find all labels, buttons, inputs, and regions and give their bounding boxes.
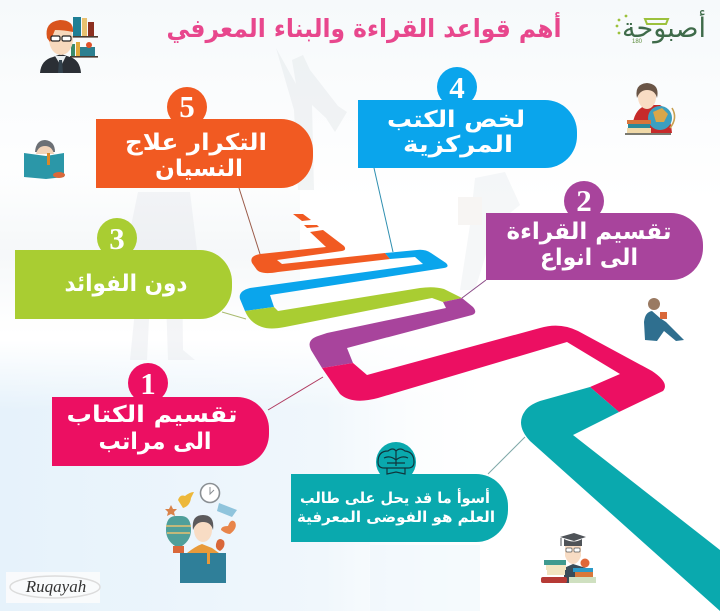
road: orange segment [251,230,390,273]
panel 1: pink: الى مراتب [98,429,212,455]
callout: teal quote: أسوأ ما قد يحل على طالب [300,488,490,507]
zigzag road [240,214,720,611]
title: أهم قواعد القراءة والبناء المعرفي [166,12,562,44]
panel 3: green: 3 [109,221,125,256]
panel 4: blue: المركزية [403,132,513,158]
panel 2: purple: الى انواع [540,245,638,271]
panel 3: green [15,218,232,319]
icon: brain and book [378,449,414,474]
road: teal segment [521,387,720,611]
panel 4: blue [358,67,577,168]
panel 2: purple: تقسيم القراءة [506,219,672,245]
road: green segment [245,287,462,328]
icon: reader behind teal book [24,140,65,179]
road: blue segment [240,250,448,311]
panel 3: green: دون الفوائد [64,271,188,297]
icon: boy reading with ideas [165,484,237,583]
callout: teal quote: العلم هو الفوضى المعرفية [297,508,495,526]
panel 2: purple [486,181,703,280]
panel 4: blue: 4 [449,70,465,105]
signature: Ruqayah [6,572,100,603]
logo: أصبوحة [622,9,706,44]
silhouette: faint business people [124,48,520,360]
icon: graduate with books [541,533,596,583]
road: pink segment [322,326,665,412]
panel 1: pink: تقسيم الكتاب [66,402,238,428]
icon: student with globe [625,83,675,135]
signature: Ruqayah: Ruqayah [25,577,86,596]
panel 5: orange: 5 [179,89,195,124]
icon: man with bookshelf [40,17,98,73]
logo: 180 [632,39,643,45]
panel 2: purple: 2 [576,183,592,218]
callout: teal quote [291,442,508,542]
panel 4: blue: لخص الكتب [387,107,525,133]
road: orange arrow dashes [293,214,319,228]
panel 1: pink [52,363,269,466]
panel 5: orange: النسيان [155,156,243,182]
panel 5: orange [96,87,313,188]
panel 5: orange: التكرار علاج [125,130,267,156]
road: purple segment [310,298,475,368]
icon: sitting reader [644,298,684,341]
panel 1: pink: 1 [140,366,156,401]
connector lines [222,168,525,474]
